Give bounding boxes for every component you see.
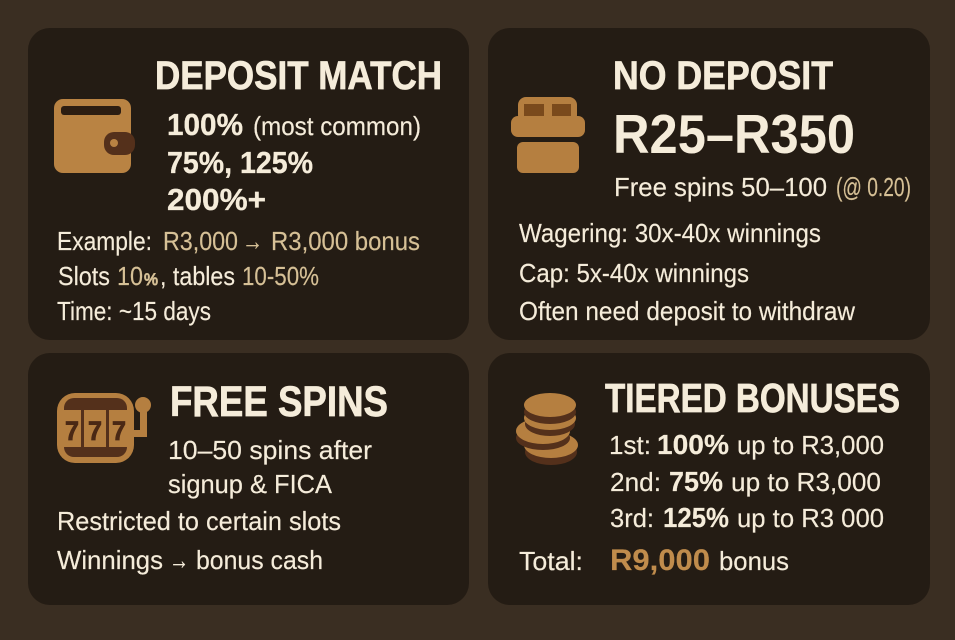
tier list: 100%	[657, 429, 729, 460]
icon: coin stack	[516, 393, 578, 465]
panel: tiered bonuses	[488, 353, 930, 605]
deposit match details: %	[144, 270, 158, 289]
tier list: up to R3,000	[737, 430, 884, 460]
tier list: 125%	[663, 502, 729, 533]
free spins details: Winnings	[57, 545, 163, 575]
free spins line: Free spins 50–100	[614, 172, 827, 202]
tier list: up to R3 000	[737, 503, 884, 533]
deposit match details: , tables	[160, 261, 235, 291]
deposit match details: 10-50%	[242, 261, 319, 291]
no deposit details: Wagering: 30x-40x winnings	[519, 218, 821, 248]
panel: deposit match	[28, 28, 469, 340]
deposit match details: R3,000 bonus	[271, 226, 420, 256]
no deposit details: Cap: 5x-40x winnings	[519, 258, 749, 288]
deposit match details: Time: ~15 days	[57, 296, 211, 326]
total bonus: Total:	[519, 546, 583, 576]
match percentages	[167, 107, 421, 217]
free spins details	[57, 506, 341, 575]
heading: deposit match: DEPOSIT MATCH	[155, 54, 442, 98]
free spins details: →	[169, 545, 189, 575]
deposit match details: →	[242, 226, 263, 256]
icon: slot machine: 7	[112, 416, 126, 446]
panel: no deposit	[488, 28, 930, 340]
free spins summary	[168, 435, 372, 499]
free spins details: bonus cash	[196, 545, 323, 575]
heading: free spins: FREE SPINS	[170, 378, 388, 426]
icon: slot machine: 7	[65, 416, 79, 446]
tier list: up to R3,000	[731, 467, 881, 497]
match percentages: (most common)	[253, 111, 421, 141]
free spins summary: signup & FICA	[168, 469, 333, 499]
icon: slot machine	[57, 393, 151, 463]
no deposit details	[519, 218, 855, 326]
tier list	[609, 429, 884, 533]
total bonus	[519, 544, 789, 577]
free spins line: (@ 0.20)	[836, 172, 911, 202]
free spins details: Restricted to certain slots	[57, 506, 341, 536]
icon: wallet	[54, 99, 135, 173]
tier list: 75%	[669, 466, 723, 497]
panel: free spins	[28, 353, 469, 605]
match percentages: 200%+	[167, 182, 266, 217]
tier list: 3rd:	[610, 503, 654, 533]
tier list: 2nd:	[610, 467, 661, 497]
amount range: R25–R350	[613, 103, 855, 165]
deposit match details: Slots	[58, 261, 110, 291]
icon: box	[511, 97, 585, 173]
deposit match details	[57, 226, 420, 326]
no deposit details: Often need deposit to withdraw	[519, 296, 855, 326]
icon: slot machine: 7	[88, 416, 102, 446]
free spins summary: 10–50 spins after	[168, 435, 372, 465]
total bonus: bonus	[719, 546, 789, 576]
match percentages: 100%	[167, 107, 243, 142]
total bonus: R9,000	[610, 544, 710, 577]
heading: no deposit: NO DEPOSIT	[613, 54, 833, 98]
deposit match details: R3,000	[163, 226, 238, 256]
deposit match details: 10	[117, 261, 143, 291]
tier list: 1st:	[609, 430, 651, 460]
match percentages: 75%, 125%	[167, 145, 313, 180]
deposit match details: Example:	[57, 226, 152, 256]
